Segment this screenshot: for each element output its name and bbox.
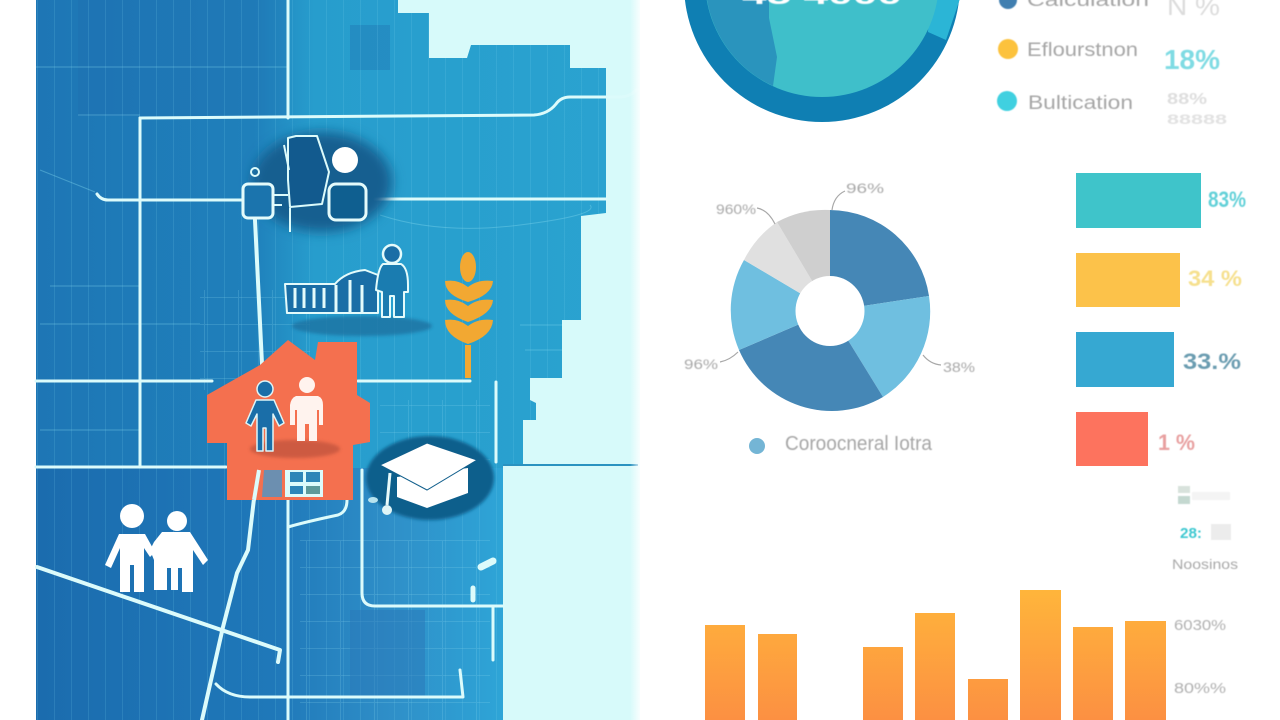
donut inner disc — [705, 0, 939, 97]
roads — [36, 0, 636, 720]
donut labels: 96% — [684, 356, 718, 372]
teal label — [1180, 524, 1231, 542]
bar 3: 33.% — [1183, 349, 1241, 374]
land area — [36, 0, 640, 720]
axis label 1: Noosinos — [1172, 556, 1238, 572]
legend row 3 — [997, 91, 1227, 127]
legend row 2 — [998, 39, 1220, 75]
person: blue — [246, 381, 284, 451]
icon: house with residents — [207, 340, 370, 500]
legend row 3: 88888 — [1167, 111, 1227, 127]
right fade — [630, 0, 642, 720]
legend row 3: Bultication — [1028, 93, 1133, 114]
bar 2: 34 % — [1188, 266, 1242, 291]
teal label: 28: — [1180, 525, 1202, 542]
leader lines — [720, 191, 941, 365]
donut legend: Coroocneral Iotra — [785, 433, 933, 455]
disc left segment — [707, 0, 777, 86]
water background — [36, 0, 640, 720]
coastline stroke — [503, 464, 638, 466]
small side labels — [1172, 486, 1238, 697]
bar chart: horizontal — [1076, 173, 1246, 466]
legend row 2: Eflourstnon — [1027, 40, 1138, 61]
donut labels — [684, 180, 975, 375]
panel: middle donut chart — [684, 180, 975, 455]
icon: tractor — [243, 132, 392, 232]
donut labels: 38% — [943, 359, 975, 375]
legend row 1 — [999, 0, 1220, 21]
bar 4 — [1076, 412, 1195, 466]
house lower windows — [254, 470, 323, 500]
legend row 2: 18% — [1164, 44, 1220, 75]
bar 4: 1 % — [1158, 430, 1195, 455]
person: white — [290, 377, 323, 441]
bar 3 — [1076, 332, 1241, 387]
panel: map — [36, 0, 642, 720]
bar 2 — [1076, 253, 1242, 307]
axis label 2: 6030% — [1174, 617, 1226, 634]
bar 1: 83% — [1208, 187, 1246, 212]
icon: couple — [105, 504, 208, 592]
legend row 3: 88% — [1167, 91, 1207, 108]
axis label 3: 80%% — [1174, 680, 1226, 697]
icon: graduation cap — [366, 436, 494, 520]
donut outer ring — [684, 0, 960, 122]
legend: top donut — [997, 0, 1227, 127]
faint label — [1178, 486, 1230, 504]
bar 1 — [1076, 173, 1246, 228]
ring light segment — [928, 0, 960, 40]
icon: wheat — [445, 252, 493, 378]
house shadow — [250, 440, 340, 458]
donut labels: 96% — [846, 180, 884, 196]
donut labels: 960% — [716, 201, 756, 217]
panel: top donut chart — [684, 0, 965, 122]
bar chart: vertical orange — [705, 590, 1166, 720]
donut segments — [731, 210, 930, 411]
icon: farmer and livestock — [285, 245, 432, 336]
house shape — [207, 340, 370, 500]
